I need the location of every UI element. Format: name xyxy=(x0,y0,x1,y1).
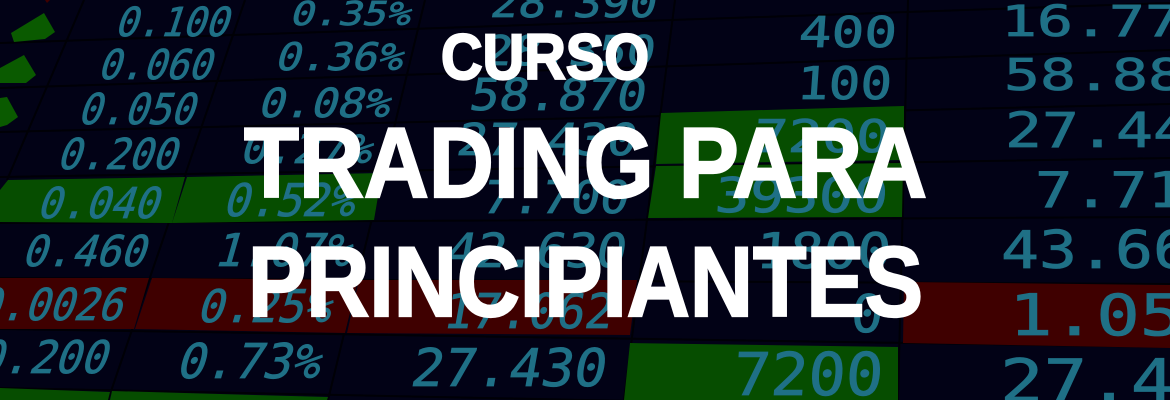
ticker column 3 xyxy=(407,0,662,399)
ticker column 2: 0.52% xyxy=(219,174,365,227)
ticker column 3: 27.430 xyxy=(453,115,642,166)
ticker column 5: 43.66 xyxy=(1001,221,1170,281)
ticker column 3: 7.700 xyxy=(479,171,634,224)
title line: CURSO: CURSO xyxy=(441,21,649,93)
ticker column 4 xyxy=(713,9,899,400)
ticker column 2: 1.07% xyxy=(210,224,361,277)
ticker column 1: 0.200 xyxy=(53,131,187,180)
green highlighted cells xyxy=(0,106,904,400)
ticker column 1: 0.100 xyxy=(111,0,239,46)
title line: TRADING PARA: TRADING PARA xyxy=(244,107,927,218)
ticker column 2 xyxy=(172,0,418,390)
ticker column 4: 7200 xyxy=(752,110,892,163)
title line: PRINCIPIANTES: PRINCIPIANTES xyxy=(248,226,923,337)
ticker column 4: 1800 xyxy=(754,222,893,280)
ticker column 2: 0.27% xyxy=(236,125,381,173)
ticker column 5: 7.71 xyxy=(1035,162,1170,219)
ticker column 1: 0.060 xyxy=(94,41,222,89)
ticker column 2: 0.73% xyxy=(172,334,331,390)
ticker column 4: 0 xyxy=(849,285,885,345)
ticker column 5: 58.88 xyxy=(1004,50,1170,101)
ticker column 3: 28.350 xyxy=(480,27,660,75)
ticker column 4: 100 xyxy=(795,57,894,110)
ticker column 5: 27.44 xyxy=(1005,103,1170,159)
ticker column 5 xyxy=(1000,0,1170,400)
title xyxy=(244,21,927,337)
ticker column 1: 0.040 xyxy=(33,180,169,229)
ticker column 3: 42.630 xyxy=(442,224,632,279)
ticker column 3: 27.430 xyxy=(407,338,612,399)
icon: green trend arrows xyxy=(0,13,55,127)
ticker column 3: 17.062 xyxy=(440,284,619,340)
ticker column 2: 0.36% xyxy=(271,36,411,80)
ticker column 2: 0.08% xyxy=(254,80,399,127)
ticker column 3: 58.870 xyxy=(466,70,651,121)
ticker column 1: 0.460 xyxy=(18,228,156,277)
ticker column 4: 39300 xyxy=(713,168,890,224)
ticker column 2: 0.25% xyxy=(193,280,341,333)
ticker column 4: 400 xyxy=(797,9,899,58)
ticker column 1: 0.050 xyxy=(74,86,205,135)
ticker column 1 xyxy=(0,0,239,384)
